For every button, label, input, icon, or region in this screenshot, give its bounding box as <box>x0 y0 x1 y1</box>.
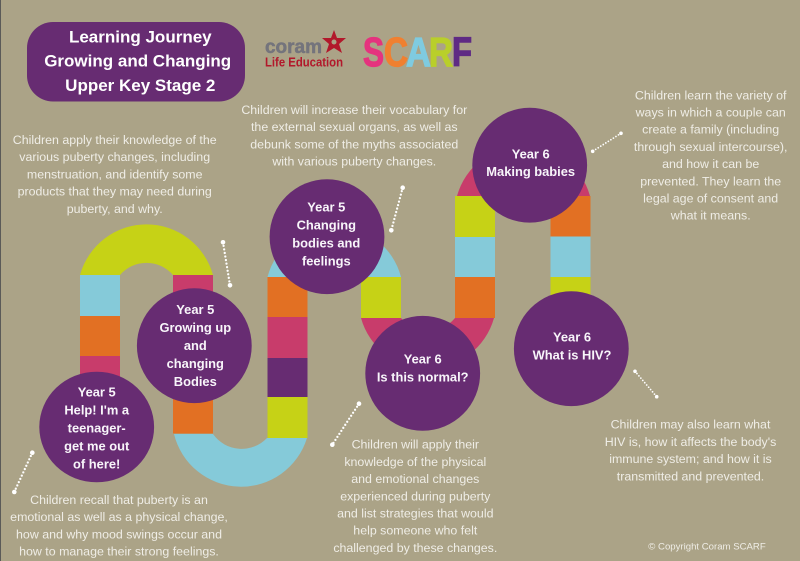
text: making babies description: ways in which a couple can <box>635 106 786 120</box>
stop: Year 5 Changing bodies and feelings: Changing <box>297 218 356 233</box>
text: making babies description: Children learn the variety of <box>635 88 787 102</box>
stop: Year 6 What is HIV? <box>514 291 629 406</box>
text: is this normal description: challenged by these changes. <box>333 541 497 555</box>
text: HIV description: HIV is, how it affects the body's <box>605 435 776 449</box>
text: teenager description: how to manage their strong feelings. <box>19 545 219 559</box>
text: is this normal description <box>333 438 497 555</box>
stop: Year 5 Growing up and changing bodies: Year 5 <box>176 302 214 317</box>
text: HIV description: immune system; and how it is <box>609 452 772 466</box>
logo: SCARF: S <box>363 29 384 75</box>
stop: Year 5 Changing bodies and feelings: Year 5 <box>307 200 345 215</box>
text: is this normal description: knowledge of the physical <box>344 455 486 469</box>
stop: Year 5 Growing up and changing bodies: Growing up <box>159 320 231 335</box>
text: making babies description: and how it can be <box>662 157 759 171</box>
logo: SCARF: C <box>384 29 408 75</box>
text: making babies description: what it means. <box>670 209 751 223</box>
text: growing up description: various puberty changes, including <box>19 150 210 164</box>
stop: Year 5 Help! I'm a teenager <box>39 372 154 482</box>
text: changing bodies description: debunk some of the myths associated <box>250 138 458 152</box>
stop: Year 6 Making babies: Year 6 <box>512 146 550 161</box>
text: is this normal description: and emotional changes <box>351 472 479 486</box>
text: changing bodies description: the external sexual organs, as well as <box>251 120 458 134</box>
connector: changing bodies <box>389 185 405 233</box>
copyright note: © Copyright Coram SCARF <box>648 541 766 552</box>
text: is this normal description: Children will apply their <box>352 438 479 452</box>
text: growing up description <box>13 133 217 216</box>
stop: Year 5 Help! I'm a teenager: Year 5 <box>78 384 116 399</box>
text: changing bodies description <box>241 103 467 169</box>
text: making babies description: create a family (including <box>642 123 779 137</box>
stop: Year 5 Growing up and changing bodies <box>137 288 252 403</box>
connector: growing up <box>221 240 232 288</box>
logo: SCARF: F <box>452 29 472 75</box>
stop: Year 5 Help! I'm a teenager: of here! <box>73 456 120 471</box>
text: growing up description: Children apply their knowledge of the <box>13 133 217 147</box>
text: teenager description: how and why mood swings occur and <box>16 528 222 542</box>
winding board-game track <box>80 145 590 487</box>
logo: SCARF: R <box>429 29 453 75</box>
text: is this normal description: help someone who felt <box>353 524 478 538</box>
stop: Year 5 Growing up and changing bodies: and <box>184 338 207 353</box>
text: teenager description <box>10 493 228 559</box>
text: teenager description: Children recall that puberty is an <box>30 493 208 507</box>
stop: Year 5 Changing bodies and feelings: feelings <box>302 254 351 268</box>
text: making babies description: legal age of consent and <box>643 192 778 206</box>
stop: Year 5 Changing bodies and feelings: bodies and <box>292 236 360 250</box>
title panel <box>27 22 245 102</box>
connector: teenager <box>12 450 35 494</box>
text: making babies description: through sexual intercourse), <box>634 140 787 154</box>
stop: Year 6 What is HIV?: Year 6 <box>553 329 591 344</box>
text: making babies description: prevented. They learn the <box>640 174 781 188</box>
text: teenager description: emotional as well as a physical change, <box>10 510 228 524</box>
text: is this normal description: and list strategies that would <box>337 506 494 520</box>
stop: Year 6 Making babies: Making babies <box>486 164 575 179</box>
stop: Year 5 Help! I'm a teenager: Help! I'm a <box>64 402 130 417</box>
text: changing bodies description: with various puberty changes. <box>271 155 436 169</box>
stop: Year 5 Growing up and changing bodies: changing <box>167 356 224 371</box>
text: growing up description: products that they may need during <box>18 185 212 199</box>
text: HIV description <box>605 418 776 483</box>
connector: making babies <box>591 132 623 153</box>
logo: SCARF <box>363 29 472 75</box>
stop: Year 6 What is HIV?: What is HIV? <box>533 347 612 362</box>
connector: is this normal <box>330 401 361 447</box>
text: growing up description: puberty, and why. <box>67 202 163 216</box>
stop: Year 5 Help! I'm a teenager: teenager- <box>68 420 126 435</box>
stop: Year 5 Changing bodies and feelings <box>270 179 384 294</box>
stop: Year 6 Is this normal?: Is this normal? <box>377 369 469 384</box>
logo: Coram Life Education <box>265 30 346 70</box>
title panel: Growing and Changing <box>44 52 231 71</box>
logo: Coram Life Education: Life Education <box>265 54 343 70</box>
text: HIV description: Children may also learn what <box>611 418 771 432</box>
text: changing bodies description: Children will increase their vocabulary for <box>241 103 467 117</box>
stop: Year 5 Growing up and changing bodies: Bodies <box>174 374 217 389</box>
stop: Year 6 Is this normal? <box>365 316 480 431</box>
stop: Year 6 Is this normal?: Year 6 <box>404 351 442 366</box>
text: making babies description <box>634 88 787 223</box>
stop: Year 5 Help! I'm a teenager: get me out <box>64 438 130 453</box>
stop: Year 6 Making babies <box>472 108 587 223</box>
connector: what is HIV <box>633 370 658 399</box>
text: HIV description: transmitted and prevented. <box>617 469 764 483</box>
title panel: Learning Journey <box>69 28 212 47</box>
title panel: Upper Key Stage 2 <box>65 76 215 95</box>
text: growing up description: menstruation, and identify some <box>27 168 203 182</box>
text: is this normal description: experienced during puberty <box>340 489 491 503</box>
logo: Coram Life Education: coram <box>265 37 322 58</box>
logo: SCARF: A <box>406 29 431 75</box>
